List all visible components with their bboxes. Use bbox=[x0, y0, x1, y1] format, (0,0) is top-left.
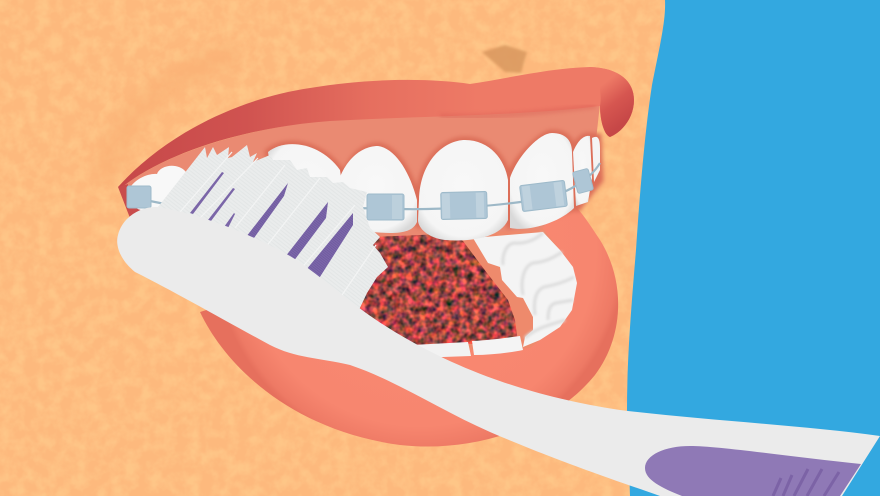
handle purple grip bbox=[645, 446, 861, 496]
upper lip shading bbox=[440, 106, 596, 117]
corner of mouth bbox=[118, 184, 142, 218]
lower teeth, front bbox=[412, 336, 523, 358]
background: blue panel bbox=[627, 0, 880, 496]
nostril mark bbox=[482, 45, 527, 73]
lower lip bbox=[200, 203, 618, 447]
bracket: premolar bbox=[572, 168, 594, 194]
bracket: canine bbox=[367, 194, 404, 220]
toothbrush handle bbox=[117, 207, 880, 496]
mouth interior: inner gum bbox=[340, 225, 565, 352]
bracket: incisor bbox=[441, 191, 487, 220]
cheek crease shadow bbox=[106, 58, 228, 172]
purple tufts bbox=[190, 172, 235, 228]
mouth interior: tongue texture bbox=[360, 234, 518, 345]
lower teeth, side bbox=[473, 232, 577, 347]
bristles bbox=[158, 145, 388, 312]
grip stripes bbox=[773, 469, 839, 496]
upper gum bbox=[122, 104, 600, 240]
wire bbox=[130, 163, 600, 209]
gum shadows around teeth bbox=[268, 133, 600, 228]
upper lip bbox=[118, 67, 634, 187]
brackets bbox=[127, 168, 594, 220]
tooth: behind brush bbox=[268, 144, 348, 228]
tooth: canine bbox=[335, 146, 417, 233]
tooth: front incisor bbox=[418, 140, 508, 240]
upper teeth bbox=[127, 133, 600, 240]
tooth: molar bbox=[592, 137, 600, 182]
tooth: back left bbox=[127, 166, 190, 235]
bracket: left bbox=[127, 186, 151, 208]
bristle streaks bbox=[180, 152, 376, 298]
bracket: lateral bbox=[520, 180, 567, 212]
tooth: premolar bbox=[573, 136, 592, 206]
upper lip right end bbox=[590, 67, 634, 137]
tooth: lateral incisor bbox=[510, 133, 574, 229]
